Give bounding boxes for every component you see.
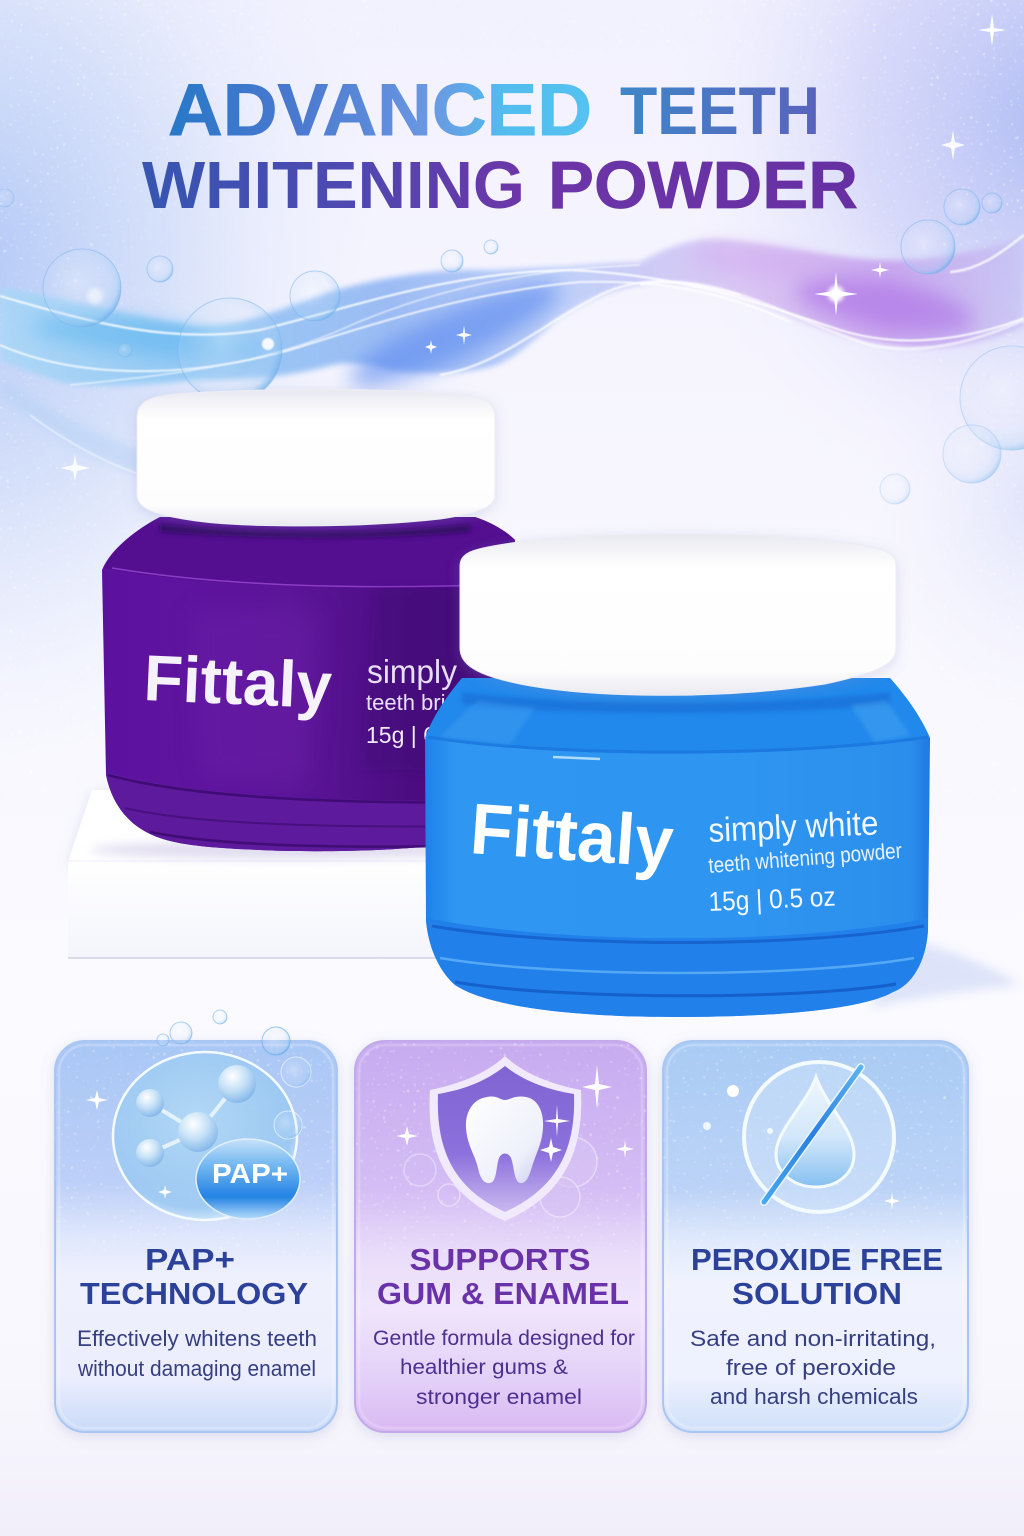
- blue jar floor shadow: [870, 940, 1020, 1008]
- title: TEETH: [620, 73, 820, 149]
- body text: Gentle formula designed for: [373, 1327, 635, 1350]
- panel: PAP+ technology: TECHNOLOGY: [80, 1276, 308, 1311]
- panel: peroxide free solution: free of peroxide: [726, 1355, 896, 1380]
- panel: peroxide free solution: SOLUTION: [732, 1276, 902, 1311]
- wave ribbons: [0, 235, 1024, 478]
- blue jar: teeth whitening powder: [707, 838, 903, 878]
- icon: PAP+ molecule: [86, 1010, 311, 1220]
- panel: PAP+ technology: without damaging enamel: [77, 1356, 316, 1381]
- jar body: [102, 517, 520, 851]
- panel: supports gum and enamel: stronger enamel: [416, 1386, 582, 1409]
- jar shoulder shading: [425, 678, 930, 754]
- title: WHITENING: [142, 148, 525, 223]
- panel: peroxide free solution: [663, 1041, 968, 1432]
- jar label: Fittaly: [142, 641, 333, 722]
- heading: PAP+: [145, 1242, 235, 1277]
- blue jar lid: [460, 534, 896, 695]
- panel: supports gum and enamel: GUM & ENAMEL: [377, 1276, 629, 1311]
- blue jar: 15g | 0.5 oz: [708, 881, 836, 917]
- title: [142, 70, 858, 223]
- jar glass base: [426, 918, 928, 1017]
- icon: peroxide-free drop: [703, 1062, 900, 1212]
- icon: PAP+ molecule: PAP+: [212, 1158, 288, 1189]
- title: POWDER: [548, 148, 858, 223]
- body text: Safe and non-irritating,: [690, 1326, 936, 1351]
- jar shoulder shading: [104, 517, 515, 588]
- jar glass base: [106, 772, 520, 851]
- body text: Effectively whitens teeth: [77, 1326, 317, 1351]
- panel: supports gum and enamel: [355, 1041, 646, 1432]
- jar label: Fittaly: [468, 789, 676, 883]
- panel: peroxide free solution: and harsh chemicals: [710, 1384, 918, 1409]
- panel: supports gum and enamel: healthier gums &: [400, 1356, 568, 1379]
- purple jar: 15g | 6: [366, 722, 436, 748]
- blue jar: [425, 678, 930, 1017]
- heading: PEROXIDE FREE: [691, 1242, 943, 1277]
- sparkle stars: [60, 14, 1006, 481]
- white pedestal: [68, 790, 490, 958]
- blue jar: simply white: [708, 804, 879, 850]
- heading: SUPPORTS: [410, 1242, 590, 1277]
- bubbles: [0, 189, 1024, 504]
- panel: PAP+ technology: [55, 1010, 337, 1432]
- purple jar: [102, 517, 520, 851]
- icon: shield with tooth: [396, 1056, 634, 1221]
- purple jar: simply: [367, 653, 457, 690]
- title: ADVANCED: [168, 70, 592, 151]
- purple jar lid: [137, 390, 495, 526]
- purple jar: teeth bri: [366, 690, 446, 715]
